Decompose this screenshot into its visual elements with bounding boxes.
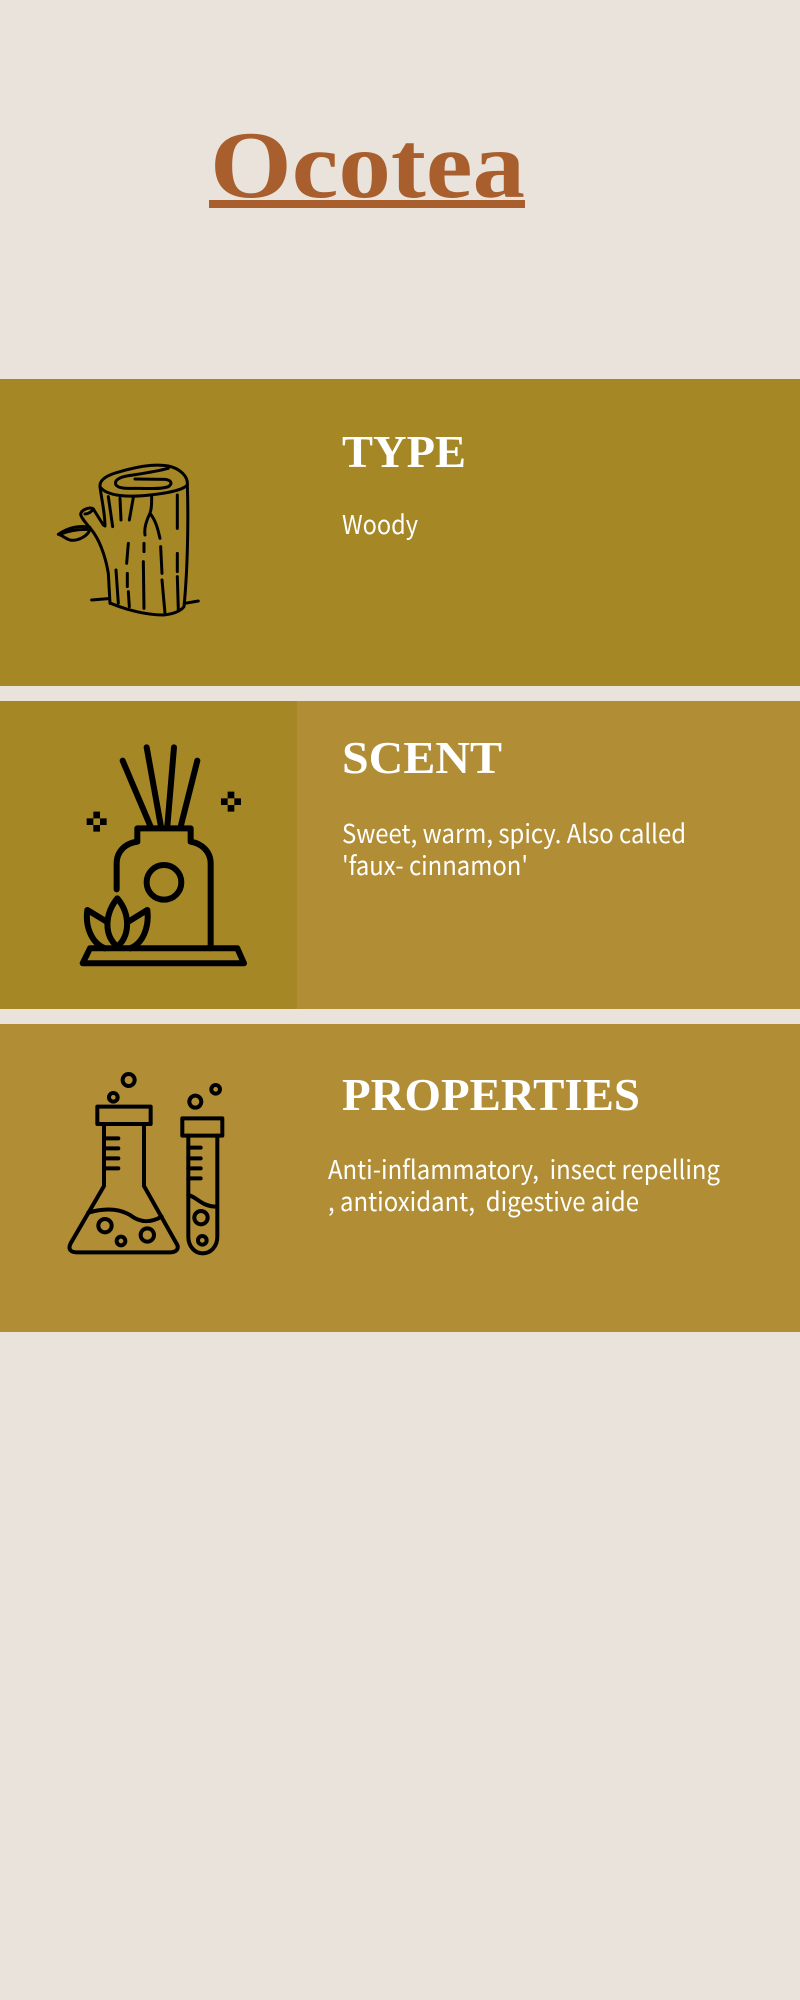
heading: scent: SCENT bbox=[342, 732, 502, 783]
text: scent bbox=[342, 814, 686, 883]
icon: flask and test tube bbox=[69, 1074, 222, 1253]
text: scent: 'faux- cinnamon' bbox=[342, 846, 528, 883]
heading: properties: PROPERTIES bbox=[342, 1069, 640, 1120]
text: properties bbox=[328, 1150, 720, 1219]
text: scent: Sweet, warm, spicy. Also called bbox=[342, 814, 686, 851]
text: type: Woody bbox=[342, 505, 418, 542]
panel: scent icon background bbox=[0, 701, 297, 1009]
title: Ocotea bbox=[210, 112, 525, 218]
icon: tree stump bbox=[58, 465, 198, 615]
text: properties: , antioxidant, digestive aide bbox=[328, 1182, 639, 1219]
panel: type bbox=[0, 379, 800, 686]
panel: scent bbox=[0, 701, 800, 1009]
heading: type: TYPE bbox=[342, 426, 466, 477]
panel: properties bbox=[0, 1024, 800, 1332]
text: properties: Anti-inflammatory, insect repelling bbox=[328, 1150, 720, 1187]
icon: reed diffuser bbox=[83, 747, 244, 963]
